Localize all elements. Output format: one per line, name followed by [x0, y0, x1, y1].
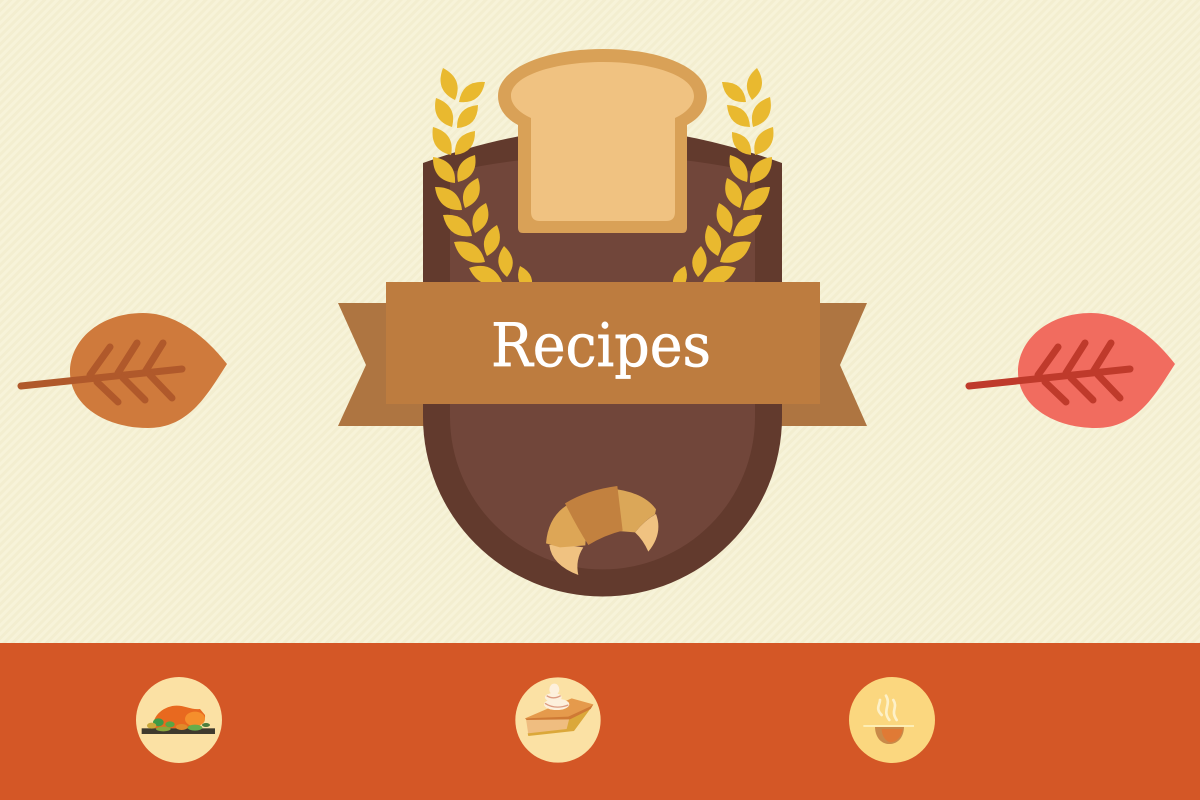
icon: left wheat stalk: [433, 68, 532, 292]
icon: right red leaf: [969, 313, 1175, 428]
icon: bread slice: [498, 49, 707, 233]
icon: pie slice: [515, 677, 601, 763]
icon: croissant: [546, 486, 658, 575]
icon: roast turkey: [136, 677, 222, 763]
icon: right wheat stalk: [673, 68, 773, 292]
title: Recipes: [491, 311, 711, 381]
icon: steaming cup: [849, 677, 935, 763]
icon: left orange leaf: [21, 313, 227, 428]
shield badge: [423, 128, 782, 596]
ribbon tails: [338, 303, 867, 426]
bottom band: [0, 643, 1200, 800]
ribbon banner: [386, 282, 820, 404]
